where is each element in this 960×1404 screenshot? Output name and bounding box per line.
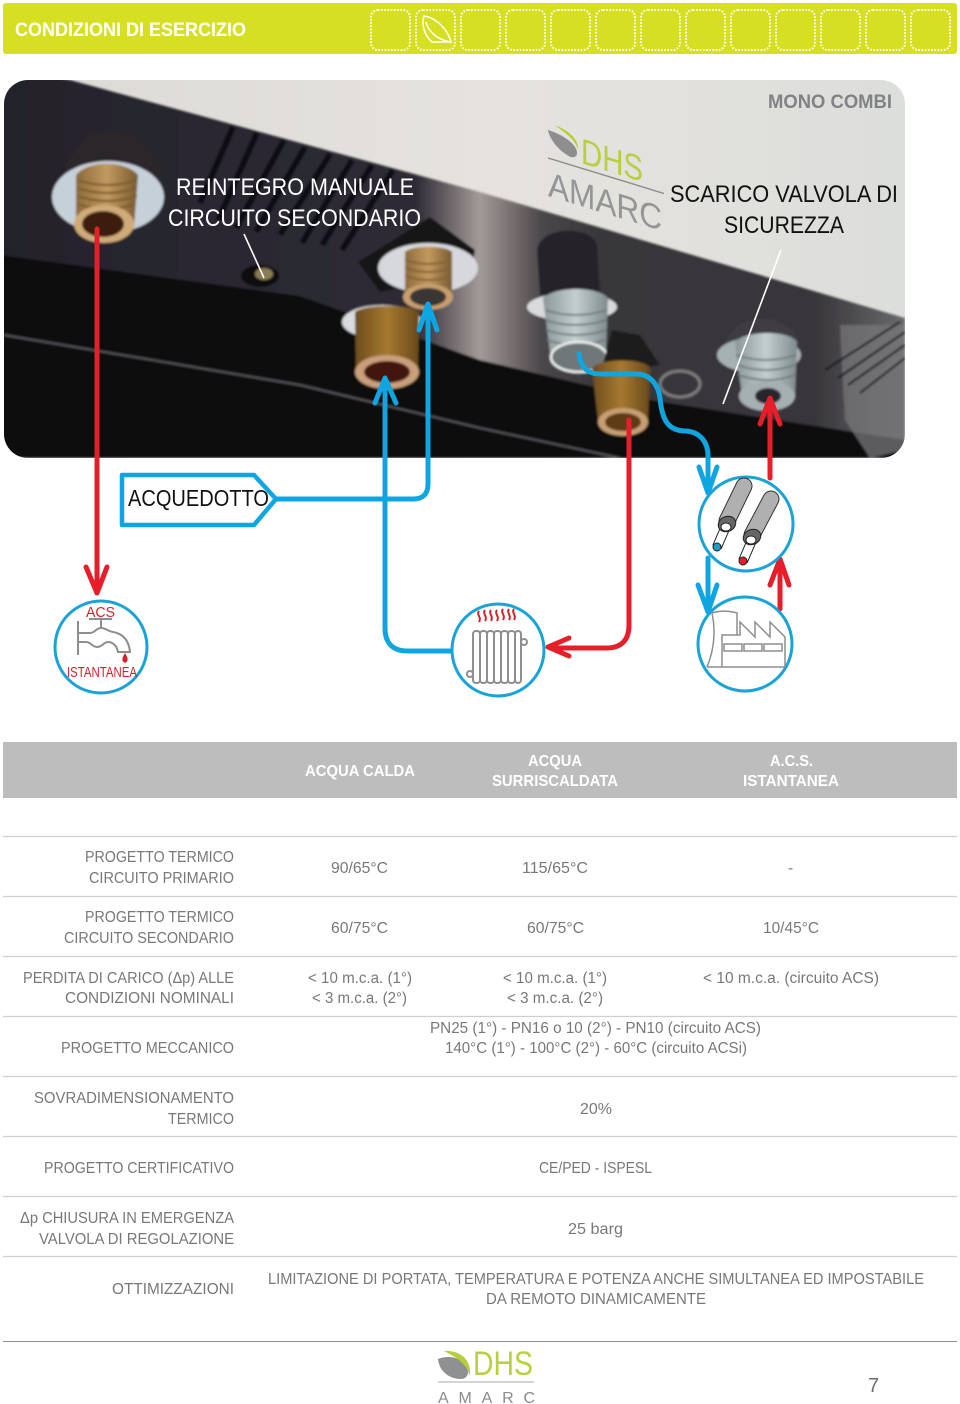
table values: DA REMOTO DINAMICAMENTE — [486, 1291, 706, 1308]
table row labels: VALVOLA DI REGOLAZIONE — [39, 1231, 234, 1248]
table row labels — [20, 849, 235, 1298]
fitting: lower brass — [602, 330, 660, 367]
table header band: ISTANTANEA — [743, 773, 839, 790]
table values: < 10 m.c.a. (1°) — [308, 970, 412, 987]
table values — [268, 860, 924, 1308]
table header band: A.C.S. — [770, 753, 813, 770]
table values: LIMITAZIONE DI PORTATA, TEMPERATURA E POTENZA ANCHE SIMULTANEA ED IMPOSTABILE — [268, 1271, 924, 1288]
label: reintegro manuale: CIRCUITO SECONDARIO — [168, 205, 421, 232]
table row labels: TERMICO — [168, 1111, 234, 1128]
fitting: silver right — [725, 319, 800, 345]
table values: 140°C (1°) - 100°C (2°) - 60°C (circuito ACSi) — [445, 1040, 747, 1057]
table values: 115/65°C — [522, 860, 588, 877]
photo: boiler connections — [0, 66, 905, 458]
label: scarico valvola di sicurezza — [670, 181, 898, 404]
footer logo: DHS — [473, 1345, 533, 1383]
boiler underside — [0, 66, 905, 458]
fitting: silver left — [537, 231, 600, 295]
table values: < 10 m.c.a. (circuito ACS) — [703, 970, 879, 987]
arrow: acquedotto to cold inlet — [276, 304, 437, 499]
table header band: ACQUA CALDA — [305, 763, 415, 780]
table row labels: PERDITA DI CARICO (Δp) ALLE — [23, 970, 234, 987]
label: scarico valvola di sicurezza: SCARICO VALVOLA DI — [670, 181, 898, 208]
logo on boiler: AMARC — [548, 165, 662, 239]
heading: condizioni di esercizio: CONDIZIONI DI ESERCIZIO — [15, 19, 246, 41]
arrow: pipes return to boiler — [760, 398, 780, 478]
table row labels: PROGETTO CERTIFICATIVO — [44, 1160, 234, 1177]
label: scarico valvola di sicurezza: SICUREZZA — [724, 212, 844, 239]
label: mono combi: MONO COMBI — [768, 92, 892, 113]
table values: 60/75°C — [331, 920, 388, 937]
table row labels: PROGETTO TERMICO — [85, 849, 234, 866]
table row labels: CIRCUITO PRIMARIO — [89, 870, 234, 887]
arrow: heating flow — [548, 420, 629, 656]
table row labels: PROGETTO MECCANICO — [61, 1040, 234, 1057]
table row labels: CIRCUITO SECONDARIO — [64, 930, 234, 947]
table values: < 10 m.c.a. (1°) — [503, 970, 607, 987]
icon: factory — [698, 597, 792, 691]
table values: CE/PED - ISPESL — [539, 1160, 652, 1177]
table row labels: SOVRADIMENSIONAMENTO — [34, 1090, 234, 1107]
arrow: to pipes — [579, 354, 717, 493]
icon: radiator — [452, 604, 544, 696]
table row labels: OTTIMIZZAZIONI — [112, 1281, 234, 1298]
arrow: pipes to factory — [698, 558, 717, 612]
fitting: hole with manual reset — [241, 265, 279, 287]
header banner — [3, 3, 957, 54]
icon: acs istantanea: ISTANTANEA — [67, 664, 137, 681]
vent slats — [200, 127, 393, 250]
table values: 25 barg — [568, 1221, 623, 1238]
dotted icon slots — [371, 10, 950, 50]
table values: - — [788, 860, 793, 877]
arrow: factory to pipes — [770, 559, 789, 609]
table values: < 3 m.c.a. (2°) — [312, 990, 407, 1007]
arrow: heating return — [375, 378, 452, 651]
table header band: ACQUA — [528, 753, 582, 770]
icon: leaf — [423, 16, 451, 42]
page number: 7 — [868, 1375, 879, 1397]
table values: < 3 m.c.a. (2°) — [507, 990, 603, 1007]
table row labels: Δp CHIUSURA IN EMERGENZA — [20, 1210, 235, 1227]
table values: 10/45°C — [763, 920, 819, 937]
table values: 60/75°C — [527, 920, 584, 937]
label: reintegro manuale: REINTEGRO MANUALE — [176, 174, 414, 201]
table header band: SURRISCALDATA — [492, 773, 618, 790]
icon: acs istantanea — [55, 601, 147, 693]
table values: PN25 (1°) - PN16 o 10 (2°) - PN10 (circuito ACS) — [430, 1020, 761, 1037]
table values: 20% — [580, 1101, 612, 1118]
logo on boiler: DHS — [581, 131, 643, 190]
box: acquedotto: ACQUEDOTTO — [128, 485, 269, 511]
table header band — [3, 742, 957, 798]
label: reintegro manuale — [168, 174, 421, 278]
table row labels: PROGETTO TERMICO — [85, 909, 234, 926]
arrow: acs hot water line — [86, 229, 107, 593]
logo on boiler — [548, 125, 664, 228]
fitting: top centre with washer — [358, 217, 475, 292]
fitting: centre brass — [342, 305, 422, 339]
footer logo — [438, 1345, 535, 1404]
box: acquedotto — [122, 475, 276, 525]
table values: 90/65°C — [331, 860, 388, 877]
icon: acs istantanea: ACS — [86, 604, 115, 621]
table row labels: CONDIZIONI NOMINALI — [65, 990, 234, 1007]
icon: pipes — [699, 477, 793, 571]
fitting: top left brass — [65, 130, 165, 205]
